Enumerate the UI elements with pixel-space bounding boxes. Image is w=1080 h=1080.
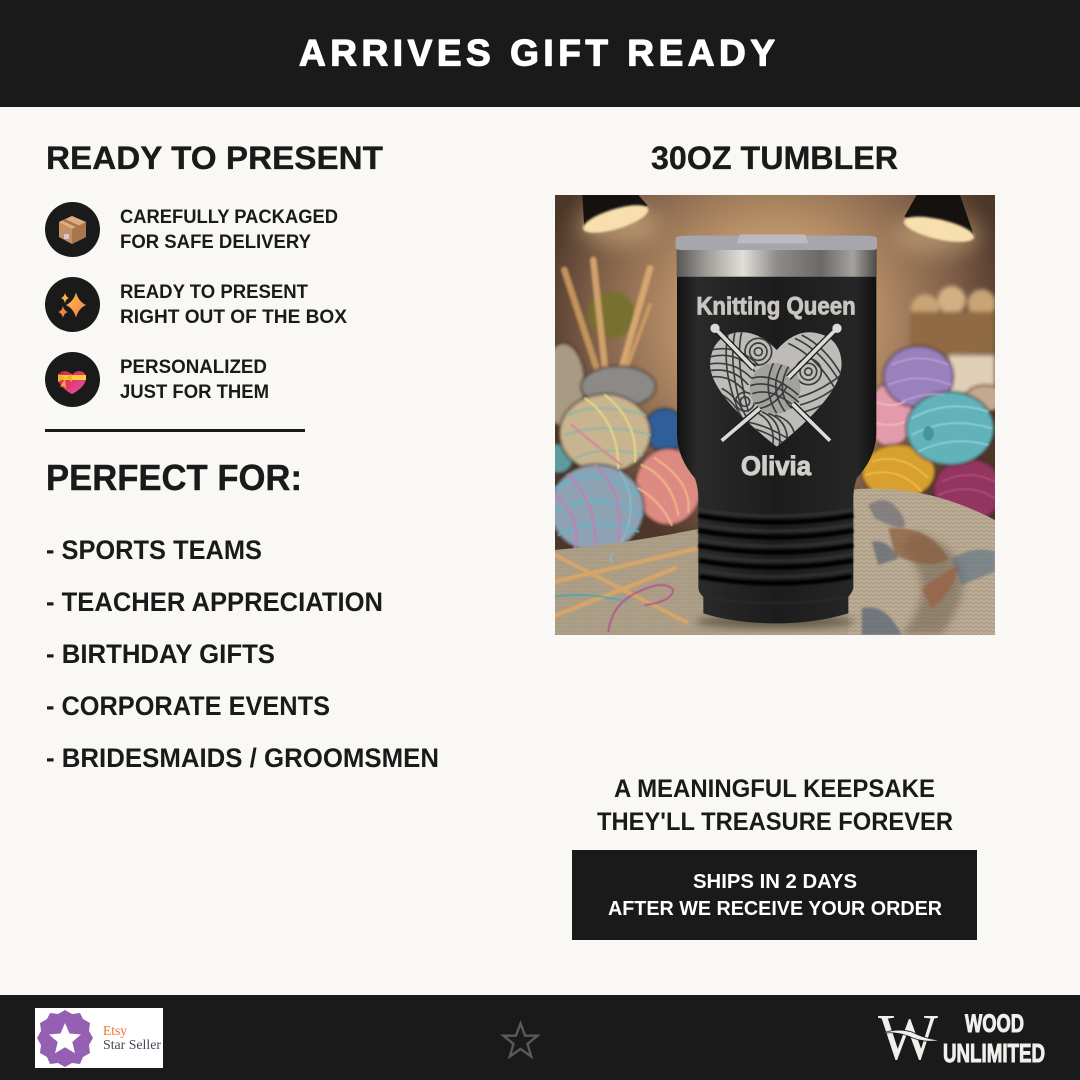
list: occasions: - BRIDESMAIDS / GROOMSMEN [46,743,439,773]
icon: package box [45,202,100,257]
benefit: ready to present [45,277,347,332]
icon: serif W with swoosh: W [878,1001,939,1074]
background shelf and plant [588,286,996,395]
needles on table [555,548,698,632]
steel band [677,249,877,277]
heading: 30oz tumbler: 30OZ TUMBLER [651,140,898,176]
yarn balls: right [862,346,1005,522]
heading: ready to present: READY TO PRESENT [46,140,383,176]
yarn strands: left [555,395,689,558]
header bar [0,0,1080,107]
keepsake tagline [597,775,953,836]
badge: etsy star seller: Etsy [103,1023,127,1038]
badge: etsy star seller: Star Seller [103,1037,162,1052]
keepsake tagline: A MEANINGFUL KEEPSAKE [614,775,935,803]
benefit: carefully packaged [45,202,338,257]
engraved heart of yarn [710,324,842,446]
list: occasions: - BIRTHDAY GIFTS [46,639,275,669]
keepsake tagline: THEY'LL TREASURE FOREVER [597,808,953,836]
crossed knitting needles [710,324,842,441]
title: ARRIVES GIFT READY [299,32,775,74]
logo: wood unlimited [878,1001,1045,1074]
text: JUST FOR THEM [120,382,269,403]
lamps [578,195,982,255]
shipping callout [572,850,977,940]
ribs [698,509,853,603]
footer bar [0,995,1080,1080]
text: PERSONALIZED [120,357,267,378]
benefit: personalized [45,352,269,407]
central yarn ball [750,363,800,414]
engraved text: knitting queen: Knitting Queen [696,293,856,320]
knitted fabric [848,489,995,635]
icon: outlined star [504,1024,538,1056]
wooden needles in jar [564,260,650,368]
engraved text: olivia: Olivia [741,451,811,481]
text: FOR SAFE DELIVERY [120,232,311,253]
list: occasions: - TEACHER APPRECIATION [46,587,383,617]
text [120,207,338,253]
photo: engraved tumbler among yarn [555,195,995,635]
shipping callout: SHIPS IN 2 DAYS [693,871,857,893]
text [120,357,269,403]
icon: sparkles [45,277,100,332]
lid [676,236,877,250]
text: CAREFULLY PACKAGED [120,207,338,228]
yarn balls: left [542,343,702,552]
tumbler [676,234,877,628]
yarn strands: right [865,358,995,498]
tumbler body [677,277,876,623]
logo: wood unlimited: WOOD [965,1010,1024,1038]
icon: heart with ribbon [45,352,100,407]
list: occasions: - SPORTS TEAMS [46,535,262,565]
list: occasions [46,535,439,773]
text [120,282,347,328]
text: RIGHT OUT OF THE BOX [120,307,347,328]
icon: purple rosette with star [37,1010,93,1067]
text: READY TO PRESENT [120,282,308,303]
badge: etsy star seller [35,1008,163,1068]
heading: perfect for: PERFECT FOR: [46,457,302,498]
list: occasions: - CORPORATE EVENTS [46,691,330,721]
shipping callout: AFTER WE RECEIVE YOUR ORDER [608,898,943,920]
table cloth [555,528,855,635]
tumbler shadow [696,615,856,628]
